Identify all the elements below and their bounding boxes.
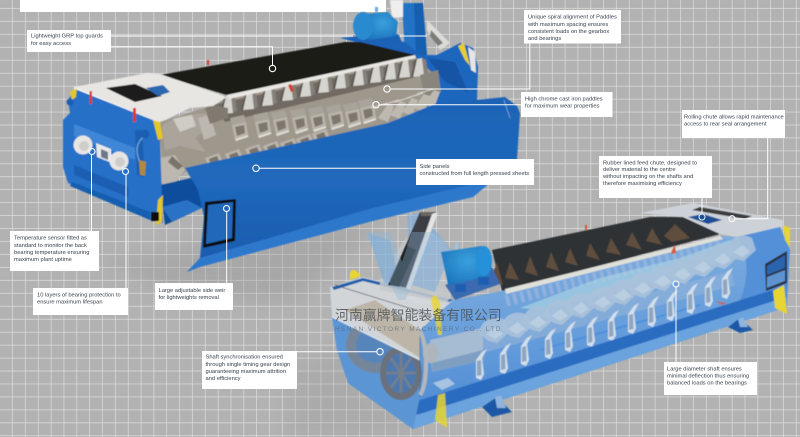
- callout: shaft synchronisation: and efficiency: [206, 376, 241, 382]
- hatch window: [765, 251, 787, 291]
- callout: shaft synchronisation: guaranteeing maximum attrition: [206, 369, 286, 375]
- drive guard: [427, 20, 450, 50]
- red lugs: [585, 225, 727, 305]
- upper paddles: [220, 58, 428, 114]
- drive pulley cover: [380, 232, 454, 304]
- shaft end: [420, 70, 441, 100]
- callout: spiral alignment of paddles: Unique spiral alignment of Paddles: [528, 14, 617, 20]
- callout: shaft synchronisation: [202, 348, 383, 389]
- callout: rolling chute: [682, 110, 785, 222]
- machine: cutaway paddle mixer: [330, 203, 790, 429]
- lower paddles: [205, 129, 330, 168]
- callout: large diameter shaft: minimal deflection thus ensuring: [667, 374, 749, 380]
- callout: spiral alignment of paddles: and bearings: [528, 36, 561, 42]
- callout: adjustable side weir: [155, 206, 233, 310]
- white end lid: [74, 73, 227, 122]
- callout: spiral alignment of paddles: consistent loads on the gearbox: [528, 29, 609, 35]
- callout: side panels: Side panels: [420, 164, 450, 170]
- callout: rolling chute: Rolling chute allows rapid maintenance: [684, 114, 784, 120]
- callout: shaft synchronisation: Shaft synchronisation ensured: [206, 354, 283, 360]
- callout: large diameter shaft: [664, 281, 757, 395]
- side weir window: [203, 199, 236, 248]
- interior: [160, 57, 435, 190]
- callout: spiral alignment of paddles: with maximum spacing ensures: [527, 22, 608, 28]
- callout: large diameter shaft: Large diameter shaft ensures: [667, 366, 742, 372]
- inspection plate: [433, 378, 455, 390]
- feed chutes: [368, 212, 452, 292]
- callout: high chrome paddles: for maximum wear properties: [525, 104, 600, 110]
- motor: [441, 243, 500, 300]
- near large paddles: [162, 113, 212, 152]
- callout: rubber lined feed chute: [599, 156, 712, 220]
- white lid: [640, 203, 783, 237]
- callout: side panels: constructed from full length pressed sheets: [420, 171, 529, 177]
- watermark company name: 河南赢牌智能装备有限公司: [335, 307, 502, 323]
- far end housing: [400, 43, 478, 112]
- gear teeth ring: [420, 331, 426, 395]
- callout: lightweight GRP top guards: Lightweight GRP top guards: [31, 34, 103, 40]
- body: [330, 227, 790, 429]
- sensor cable and connector: [137, 136, 145, 165]
- light material wave: [520, 240, 735, 310]
- yellow lifting lugs: [350, 225, 790, 428]
- callout: shaft synchronisation: through single timing gear design: [206, 362, 290, 368]
- callout: large diameter shaft: balanced loads on the bearings: [667, 380, 747, 386]
- ribbed strip: [506, 245, 722, 301]
- callout: adjustable side weir: Large adjustable side weir: [158, 288, 225, 294]
- callout: high chrome paddles: [373, 92, 612, 117]
- upper paddle backing: [213, 60, 425, 122]
- top white banner: [20, 0, 386, 12]
- end face: [63, 89, 163, 223]
- callout: lightweight GRP top guards: [27, 30, 427, 72]
- callout: adjustable side weir: for lightweights removal: [158, 295, 219, 301]
- callout: bearing protection: ensure maximum lifespan: [37, 300, 103, 306]
- side panel: [185, 97, 520, 272]
- bearing housings: [74, 136, 128, 170]
- watermark company name: HENAN VICTORY MACHINERY CO., LTD: [335, 326, 502, 333]
- callout: rubber lined feed chute: deliver material to the centre: [603, 167, 676, 173]
- callout: bearing protection: [33, 168, 128, 315]
- right end panel: [733, 227, 790, 314]
- callout: temperature sensor: Temperature sensor fitted as: [14, 236, 87, 242]
- callout: side panels: [253, 159, 534, 185]
- callout: temperature sensor: maximum plant uptime: [14, 257, 72, 263]
- callout: high chrome paddles: High chrome cast iron paddles: [525, 96, 603, 102]
- callout: temperature sensor: [10, 148, 99, 271]
- paddle fans: [479, 236, 756, 343]
- black top guard: [160, 42, 415, 95]
- left end face: [332, 317, 420, 429]
- temperature sensor plate: [96, 143, 112, 163]
- watermark logo mark: [365, 232, 440, 300]
- middle paddles: [230, 89, 440, 141]
- callout: rolling chute: access to rear seal arrangement: [684, 122, 767, 128]
- red lifting lugs: [90, 60, 294, 122]
- callout: spiral alignment of paddles: [384, 10, 621, 92]
- yellow end bracket: [458, 43, 470, 66]
- trough: [492, 217, 720, 291]
- callout: temperature sensor: bearing temperature ensuring: [14, 250, 89, 256]
- machine: closed paddle mixer with side panel removed: [63, 0, 520, 272]
- paddle teeth: [476, 268, 733, 380]
- dark corner block: [151, 212, 159, 221]
- callout: temperature sensor: standard to monitor the back: [14, 243, 87, 249]
- motor: [353, 0, 403, 43]
- shaft band: [483, 278, 733, 345]
- support feet: [482, 317, 753, 417]
- shaft: [423, 328, 484, 372]
- callout: lightweight GRP top guards: for easy access: [31, 41, 71, 47]
- callout: rubber lined feed chute: Rubber lined feed chute, designed to: [603, 160, 697, 166]
- timing gears: [346, 317, 422, 400]
- base channel: [420, 290, 777, 414]
- callout: rubber lined feed chute: therefore maximising efficiency: [603, 181, 682, 187]
- trough teeth: [490, 224, 690, 285]
- lower chassis: [160, 176, 205, 225]
- watermark company name: [335, 307, 502, 333]
- blue band behind top guard: [340, 36, 420, 57]
- callout: rubber lined feed chute: without impacting on the shafts and: [602, 174, 693, 180]
- callout: bearing protection: 10 layers of bearing protection to: [37, 292, 121, 298]
- gear cover top: [330, 277, 453, 360]
